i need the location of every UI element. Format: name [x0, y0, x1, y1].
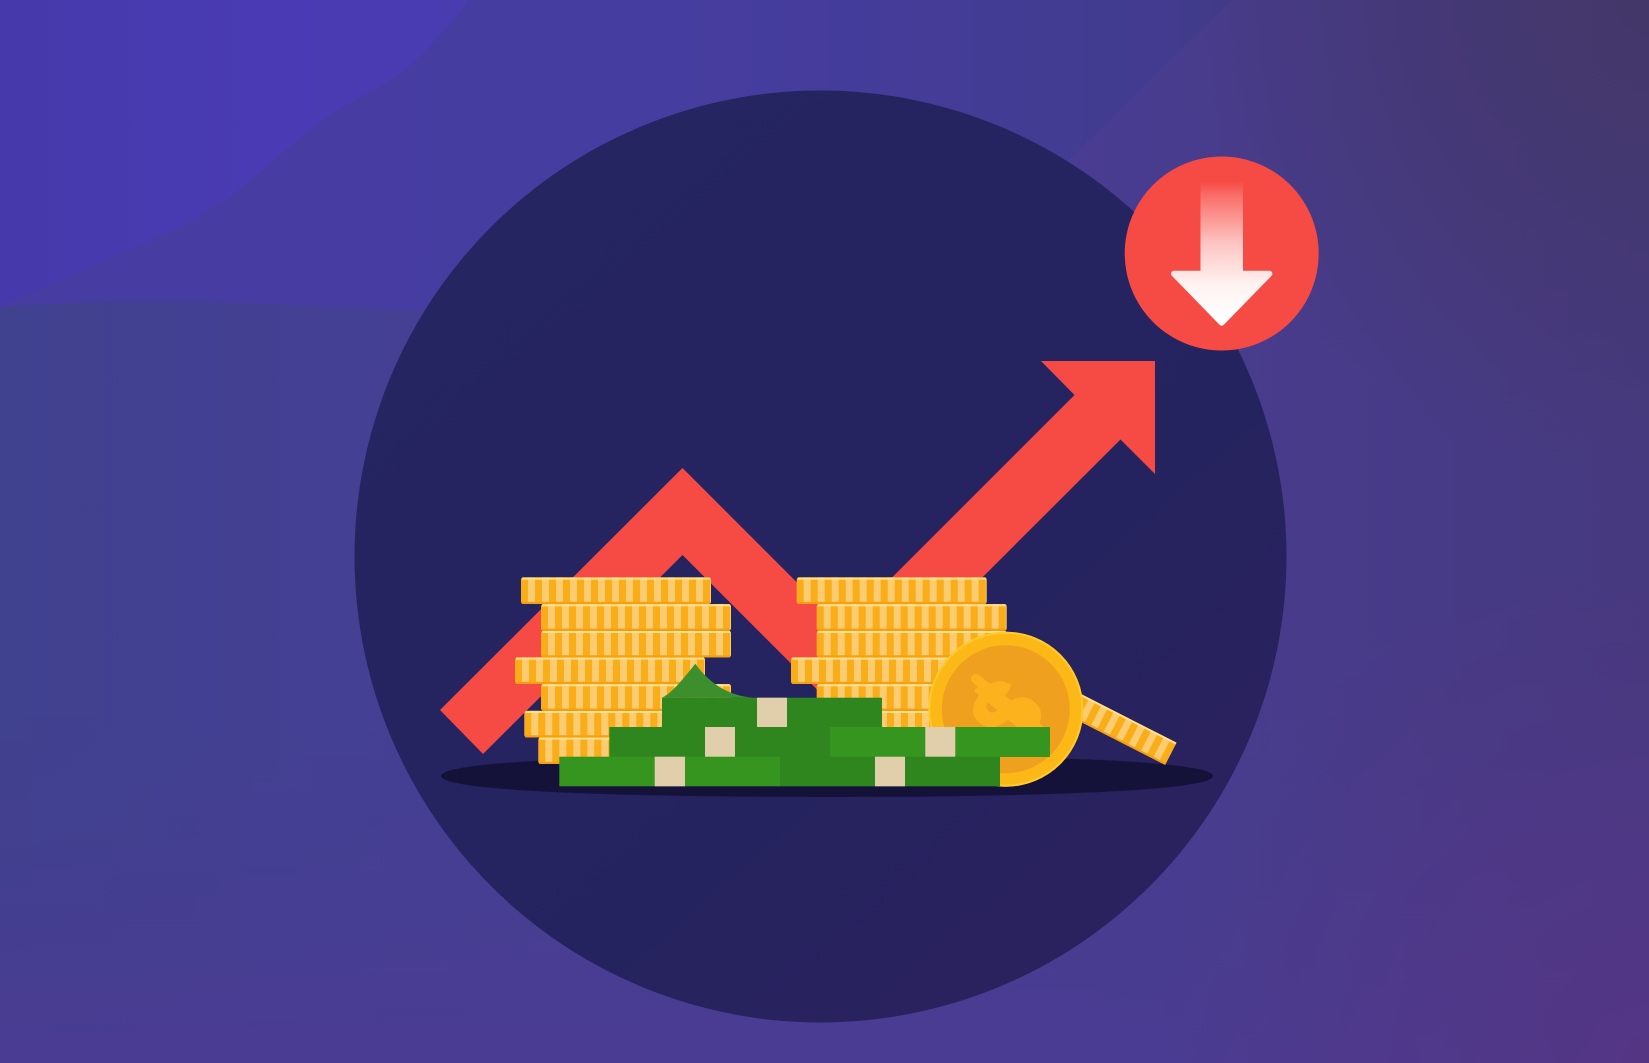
- left coin stack: [515, 577, 731, 764]
- bottom right banknote: [780, 757, 1000, 786]
- right coin stack: [791, 577, 1007, 737]
- middle left banknote: [609, 727, 830, 757]
- large dark circle: [354, 90, 1286, 1022]
- large dollar coin: [928, 632, 1083, 787]
- stack of green banknotes: [559, 664, 1050, 786]
- top banknote: [662, 698, 882, 727]
- ground shadow: [441, 755, 1213, 797]
- middle right banknote: [830, 727, 1050, 757]
- bottom left banknote: [559, 757, 780, 786]
- leaning coin edge: [1065, 691, 1177, 765]
- down arrow: [1174, 182, 1269, 323]
- curled banknote corner: [662, 664, 753, 698]
- large dollar coin: $: [949, 659, 1065, 769]
- icon: red circle with down arrow: [1125, 156, 1319, 350]
- red zigzag trend arrow: [440, 361, 1155, 754]
